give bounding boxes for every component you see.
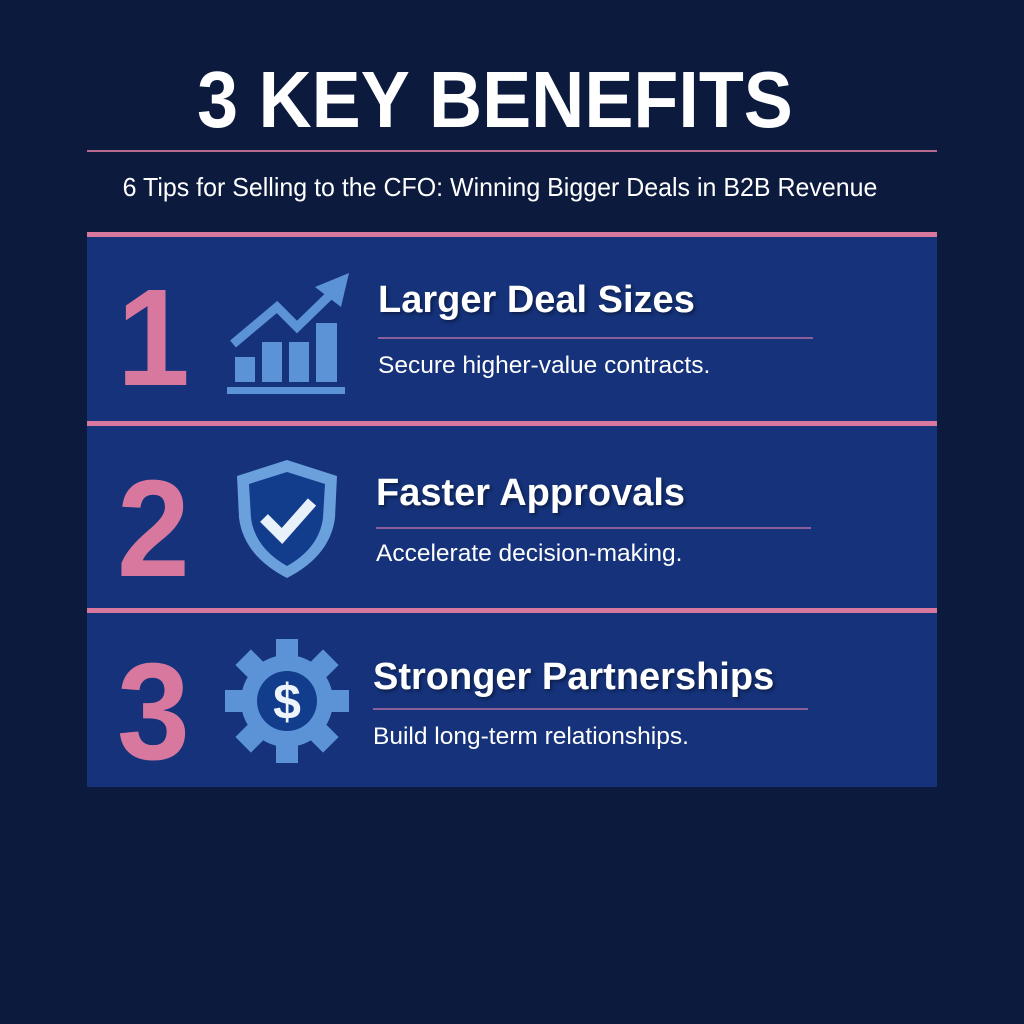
- heading: Larger Deal Sizes: [378, 279, 695, 321]
- number 1: 1: [117, 261, 190, 415]
- icon: gear with dollar: [225, 639, 349, 763]
- subtitle: 6 Tips for Selling to the CFO: Winning Bigger Deals in B2B Revenue: [123, 172, 877, 202]
- panel: larger deal sizes: [87, 237, 937, 421]
- number 2: 2: [117, 452, 190, 606]
- heading: Faster Approvals: [376, 472, 685, 514]
- description: Secure higher-value contracts.: [378, 352, 710, 379]
- description: Build long-term relationships.: [373, 723, 689, 750]
- panel: stronger partnerships: [87, 613, 937, 787]
- icon: shield check: [237, 460, 337, 578]
- title: 3 KEY BENEFITS: [197, 55, 793, 144]
- number 3: 3: [117, 635, 190, 789]
- panel: faster approvals: [87, 426, 937, 608]
- heading: Stronger Partnerships: [373, 656, 774, 698]
- icon: gear with dollar: $: [273, 674, 301, 730]
- description: Accelerate decision-making.: [376, 540, 682, 567]
- icon: bar chart with arrow: [227, 273, 349, 394]
